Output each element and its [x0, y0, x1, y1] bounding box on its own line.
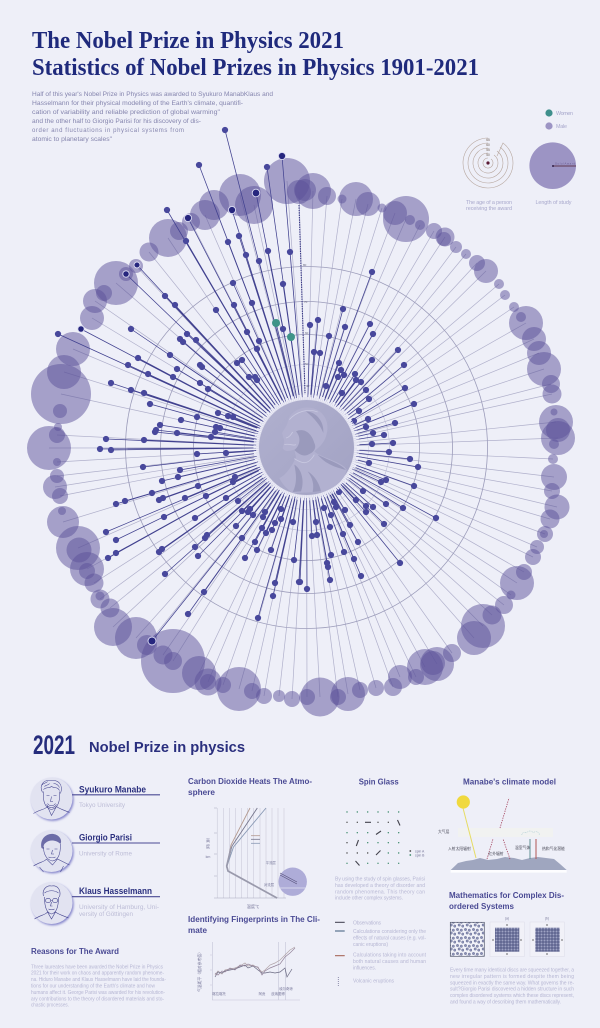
laureate: Giorgio Parisi: [30, 830, 160, 873]
atmosphere band: [458, 828, 553, 837]
spin arrows: [356, 820, 400, 866]
chart: temperature vs altitude: km: [206, 855, 210, 859]
dots: laureate age: [58, 130, 436, 618]
text: mathematics: and found a way of describing them mathematically.: [450, 999, 561, 1005]
legend: age rings: 60: [486, 143, 490, 147]
grey radial lines: [49, 181, 558, 699]
ring age labels: [303, 263, 310, 388]
heading: mathematics: Mathematics for Complex Dis-: [449, 890, 564, 900]
legend: fingerprints chart: Observations: [353, 920, 382, 926]
intro text: Half of this year's Nobel Prize in Physics was awarded to Syukuro ManabKlaus and: [32, 92, 273, 98]
ring age labels: 60: [305, 331, 309, 335]
text: reasons: Three laureates have been awarded the Nobel Prize in Physics: [31, 964, 163, 970]
labels: 温室气体: [515, 845, 530, 850]
section heading: 2021 Nobel Prize in physics: 2021: [33, 730, 75, 760]
heading: climate model: Manabe's climate model: [463, 777, 556, 787]
bubbles: length of study: [27, 158, 575, 716]
legend: fingerprints chart: Calculations taking into account: [353, 953, 427, 959]
radiation lines: [487, 798, 536, 859]
labels: 入射太阳辐射: [448, 846, 471, 851]
title: Statistics of Nobel Prizes in Physics 1901-2021: [32, 55, 479, 81]
affiliation: Hasselmann: versity of Göttingen: [79, 912, 133, 918]
ring age labels: 50: [305, 362, 309, 366]
dark age lines: [58, 130, 436, 641]
legend captions: Length of study: [536, 200, 572, 206]
chart: temperature anomaly: [197, 942, 300, 1000]
text: reasons: [31, 964, 166, 1009]
name: Manabe: Syukuro Manabe: [79, 785, 146, 796]
text: reasons: chastic processes.: [31, 1003, 69, 1009]
name: Parisi: Giorgio Parisi: [79, 832, 132, 844]
text: mathematics: complex disordered systems which these discs represent,: [450, 993, 574, 999]
legend: fingerprints chart: influences.: [353, 965, 376, 971]
text: reasons: tions for our understanding of the Earth's climate and how: [31, 984, 155, 990]
chart: temperature vs altitude: 对流层: [264, 882, 275, 887]
heading: carbon dioxide: [188, 776, 312, 797]
text: mathematics: [450, 968, 574, 1005]
text: mathematics: sult?Giorgio Parisi discovered a hidden structure in such: [450, 987, 574, 993]
text: spin glass: include other complex systems.: [335, 896, 403, 902]
text: reasons: humans affect it. George Parisi was awarded for his revolution-: [31, 990, 165, 996]
legend: age rings: 50: [486, 153, 490, 157]
heading: fingerprints: [188, 914, 320, 935]
concentric age rings: [126, 266, 488, 628]
diagram: disc packing: (a): [505, 916, 509, 920]
portrait: Parisi: [30, 830, 74, 873]
affiliation: Parisi: University of Rome: [79, 852, 133, 858]
text: reasons: ary contributions to the theory of disordered materials and sto-: [31, 996, 164, 1002]
chart: temperature vs altitude: 度: [206, 843, 211, 850]
ring age labels: 40: [306, 384, 310, 388]
heading: carbon dioxide: Carbon Dioxide Heats The Atmo-: [188, 776, 312, 786]
legend: women: Women: [556, 111, 573, 117]
diagram: climate model: [438, 795, 567, 873]
legend: [463, 109, 576, 212]
intro text: and the other half to Giorgio Parisi for his discovery of dis-: [32, 119, 201, 125]
heading: reasons for the award: Reasons for The Award: [31, 946, 119, 956]
diagram: disc packing: (b): [545, 916, 549, 920]
legend: fingerprints chart: effects of natural causes (e.g. vol-: [353, 936, 426, 942]
heading: mathematics: ordered Systems: [449, 901, 514, 911]
text: mathematics: new irregular pattern is formed despite them being: [450, 974, 574, 980]
ground: [451, 857, 567, 873]
diagram: spin glass grid: spin A: [415, 850, 425, 854]
heading: fingerprints: Identifying Fingerprints in The Cli-: [188, 914, 320, 924]
text: spin glass: has developed a theory of disorder and: [335, 883, 425, 889]
chart: temperature vs altitude: [206, 808, 307, 910]
chart: temperature vs altitude: 温度℃: [247, 903, 259, 910]
legend: fingerprints chart: [335, 920, 427, 986]
title: The Nobel Prize in Physics 2021: [32, 28, 344, 54]
green dots: women laureates: [272, 319, 295, 341]
legend: fingerprints chart: Calculations considering only the: [353, 929, 426, 935]
legend: fingerprints chart: Volcanic eruptions: [353, 978, 394, 984]
sun: [457, 795, 476, 858]
chart: temperature anomaly: 气温距平（相对参考值）: [197, 950, 202, 992]
text: reasons: na. Hiduro Manabe and Klaus Hasselmann have laid the founda-: [31, 977, 166, 983]
anomaly curves: [215, 947, 295, 977]
legend: length of study circle: Solo/Award: [555, 162, 575, 166]
text: spin glass: random phenomena. This theory can: [335, 889, 425, 895]
legend captions: receiving the award: [466, 206, 512, 212]
diagram: disc packing: [450, 916, 564, 956]
chart: temperature anomaly: 喀拉喀托: [212, 991, 226, 996]
legend: age rings: 65: [486, 138, 490, 142]
labels: 热和气化潜能: [542, 846, 565, 851]
legend: fingerprints chart: both natural causes and human: [353, 959, 426, 965]
chart: temperature anomaly: 皮纳图博: [271, 991, 285, 996]
dashed marker line: [299, 205, 305, 393]
section heading: 2021 Nobel Prize in physics: [33, 730, 245, 760]
ring age labels: 80: [303, 263, 307, 267]
heading: fingerprints: mate: [188, 925, 207, 935]
ring age labels: 70: [304, 300, 308, 304]
box b: [490, 922, 524, 956]
labels: [438, 829, 565, 856]
curve lines: [227, 808, 277, 898]
diagram: spin glass grid: [347, 812, 425, 866]
chart: temperature anomaly: 阿贡: [259, 991, 266, 996]
box a: [450, 922, 484, 956]
portrait: Hasselmann: [30, 882, 74, 925]
title: [32, 28, 479, 81]
intro text: [32, 92, 273, 143]
legend: age rings: [463, 138, 513, 188]
portrait: Manabe: [30, 778, 74, 821]
heading: spin glass: Spin Glass: [359, 777, 399, 787]
labels: 红外辐射: [488, 851, 504, 856]
chart: temperature anomaly: 埃尔奇琼: [279, 986, 293, 991]
intro text: cation of variability and reliable prediction of global warming": [32, 110, 220, 116]
laureate: Syukuro Manabe: [30, 778, 160, 821]
intro text: order and fluctuations in physical systems from: [32, 128, 184, 134]
chart: temperature vs altitude: 平流层: [266, 860, 276, 865]
intro text: atomic to planetary scales": [32, 137, 112, 143]
diagram: spin glass grid: spin B: [415, 854, 425, 858]
legend captions: [466, 200, 572, 212]
legend captions: The age of a person: [466, 200, 512, 206]
affiliation: Hasselmann: University of Hamburg, Uni-: [79, 905, 159, 911]
magnifier circle: [278, 868, 307, 896]
legend: age rings: 55: [486, 148, 490, 152]
text: spin glass: By using the study of spin glasses, Parisi: [335, 877, 425, 883]
text: mathematics: Every time many identical discs are squeezed together, a: [450, 968, 574, 974]
text: spin glass: [335, 877, 425, 902]
section heading: 2021 Nobel Prize in physics: Nobel Prize in physics: [89, 739, 245, 756]
medal: [256, 397, 357, 498]
name: Hasselmann: Klaus Hasselmann: [79, 886, 152, 897]
text: reasons: 2021 for their work on chaos and apparently random phenome-: [31, 971, 164, 977]
affiliation: Hasselmann: [79, 905, 159, 918]
labels: 大气层: [438, 829, 450, 834]
legend: fingerprints chart: canic eruptions): [353, 942, 388, 948]
heading: mathematics: [449, 890, 564, 911]
ringed dots: shared prizes: [78, 152, 286, 645]
radial chart: [27, 130, 575, 716]
chart: temperature vs altitude: 高: [206, 837, 210, 844]
heading: carbon dioxide: sphere: [188, 787, 215, 797]
legend: male: Male: [556, 124, 567, 130]
text: mathematics: squeezed in exactly the same way. What governs the re-: [450, 980, 574, 986]
affiliation: Manabe: Tokyo University: [79, 803, 125, 809]
intro text: Hasselmann for their physical modelling of the Earth's climate, quantifi-: [32, 101, 243, 107]
laureate: Klaus Hasselmann: [30, 882, 160, 925]
box c: [530, 922, 564, 956]
